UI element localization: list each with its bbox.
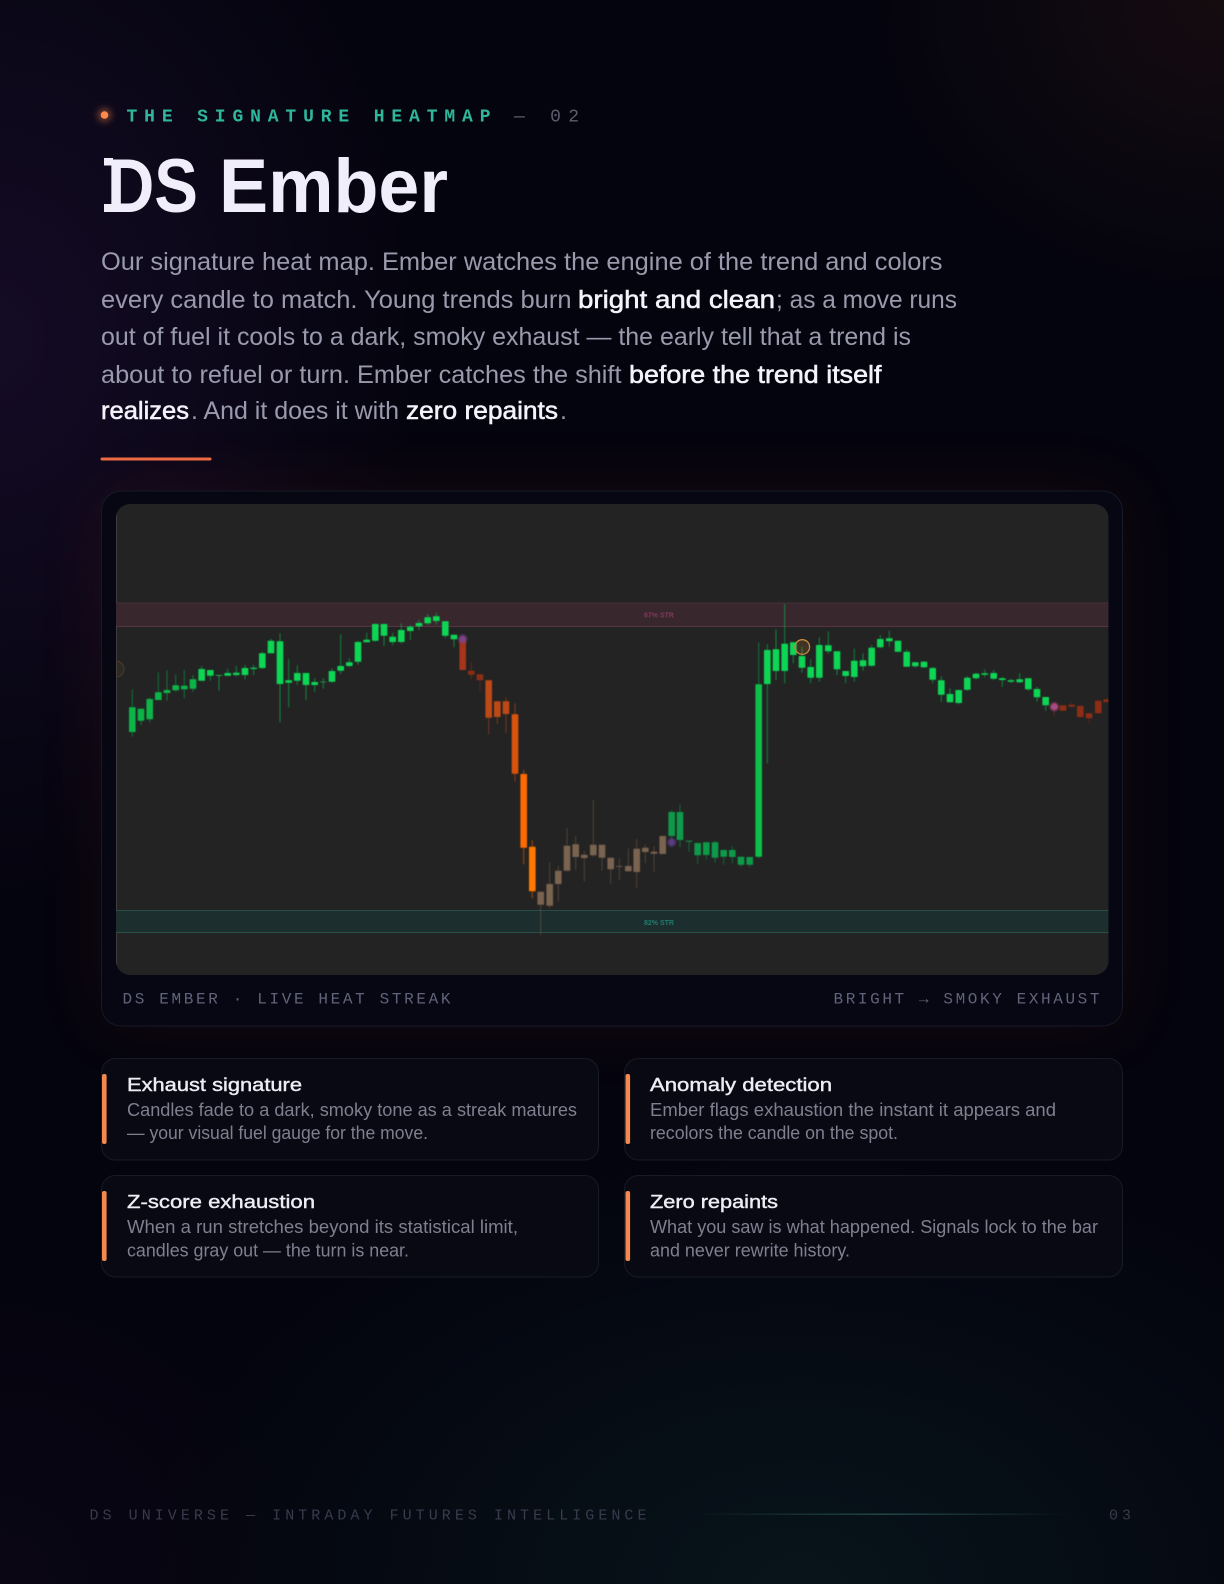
footer [90,1508,1131,1524]
page artwork [90,104,1130,1520]
band: upper resistance: 67% STR [644,613,674,620]
intro paragraph: before the trend itself [629,361,882,389]
candles: bright green trend [202,604,1046,763]
intro paragraph: ; as a move runs [776,286,957,314]
marker: orange ring [795,640,810,654]
intro paragraph: . [560,397,567,425]
candlesticks [132,604,1107,935]
candles: dark green base [672,804,750,867]
intro paragraph: Our signature heat map. Ember watches the engine of the trend and colors [101,248,942,276]
candles: dark red cooling [463,635,1107,723]
card: z-score exhaustion [102,1176,598,1277]
title: Ember [219,144,448,229]
panel glow [101,491,1123,1026]
card: zero repaints: What you saw is what happened. Signals lock to the bar [650,1217,1098,1237]
chart screenshot [108,504,1109,975]
band: lower support: 82% STR [644,920,674,927]
card: z-score exhaustion: candles gray out — the turn is near. [127,1240,409,1260]
marker: pink anomaly dot right [1050,703,1058,711]
intro paragraph: zero repaints [406,397,558,425]
card: zero repaints: Zero repaints [650,1192,778,1212]
band: lower support [116,910,1109,932]
card: zero repaints [624,1176,1122,1277]
band: upper resistance [116,603,1109,626]
card: zero repaints: and never rewrite history. [650,1240,850,1260]
title: DS [107,144,198,229]
accent rule [100,458,212,460]
intro paragraph [101,248,957,425]
candles: early green run [132,670,193,737]
eyebrow label: THE SIGNATURE HEATMAP [126,108,491,128]
marker: purple anomaly dot middle [668,838,676,846]
candles: smoky exhaust [541,800,663,935]
card: anomaly detection: recolors the candle on the spot. [650,1123,898,1143]
card: z-score exhaustion: Z-score exhaustion [127,1192,315,1212]
chart caption right: BRIGHT → SMOKY EXHAUST [834,990,1100,1008]
card: exhaust signature: Candles fade to a dark, smoky tone as a streak matures [127,1100,577,1120]
intro paragraph: every candle to match. Young trends burn [101,286,572,314]
icon: ember dot [98,108,112,122]
marker: purple anomaly dot top [459,635,467,643]
card: z-score exhaustion: When a run stretches beyond its statistical limit, [127,1217,518,1237]
intro paragraph: bright and clean [578,286,775,314]
chart caption left: DS EMBER · LIVE HEAT STREAK [122,990,451,1008]
candles: orange selloff [489,680,532,898]
intro paragraph: out of fuel it cools to a dark, smoky exhaust — the early tell that a trend is [101,323,911,351]
eyebrow [98,108,579,128]
candle: breakout bar [758,642,760,858]
card: anomaly detection: Ember flags exhaustion the instant it appears and [650,1100,1056,1120]
card: exhaust signature: Exhaust signature [127,1075,302,1095]
page number: 03 [1109,1508,1131,1524]
eyebrow number: — 02 [513,108,579,128]
card: exhaust signature [102,1058,598,1160]
title [104,144,448,229]
marker: left edge ring [116,660,124,678]
panel: chart card [102,491,1122,1026]
intro paragraph: realizes [101,397,189,425]
intro paragraph: about to refuel or turn. Ember catches the shift [101,361,622,389]
card: exhaust signature: — your visual fuel gauge for the move. [127,1123,428,1143]
footer label: DS UNIVERSE — INTRADAY FUTURES INTELLIGENCE [90,1508,646,1524]
intro paragraph: . And it does it with [191,397,399,425]
card: anomaly detection: Anomaly detection [650,1075,832,1095]
card: anomaly detection [624,1058,1122,1160]
